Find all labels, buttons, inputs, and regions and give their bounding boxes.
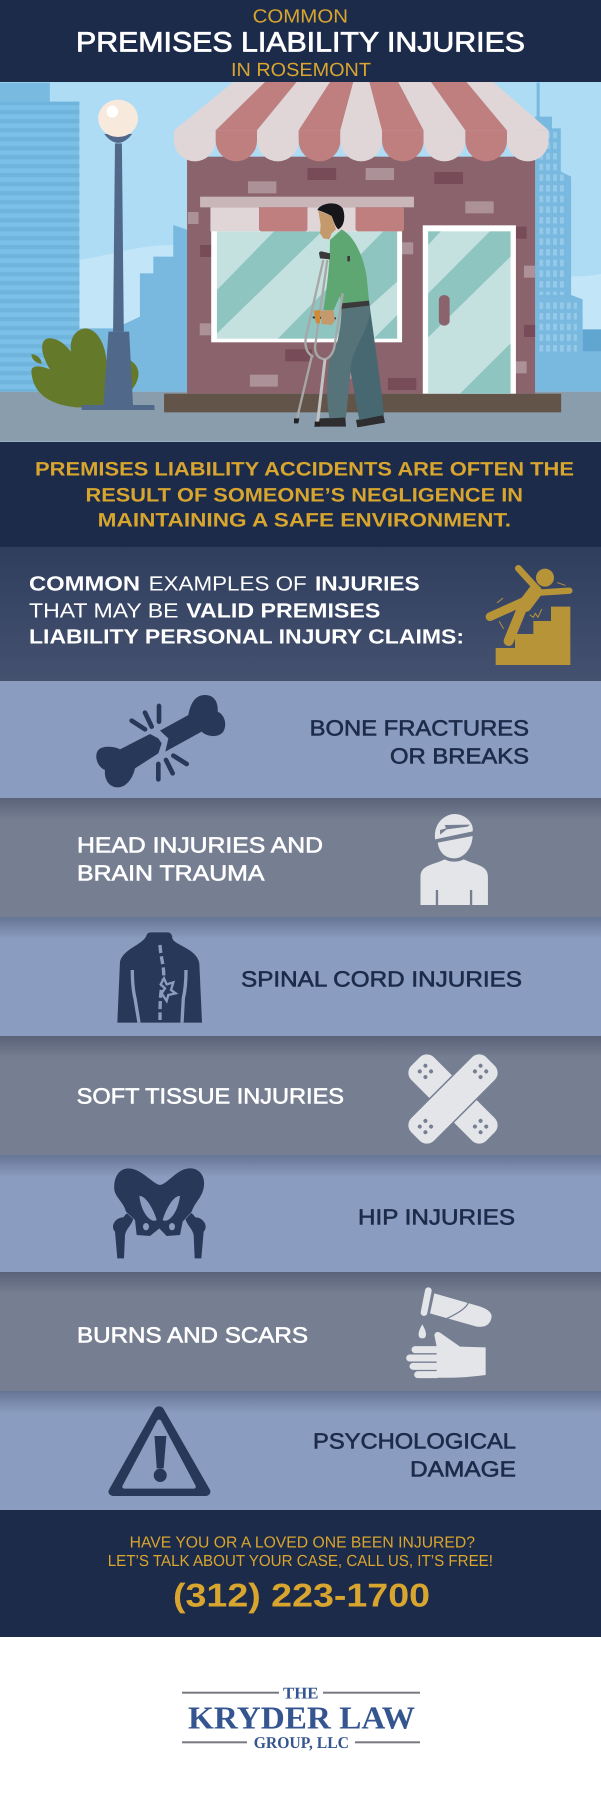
icon: warning triangle [113, 1411, 205, 1492]
row: soft tissue [0, 1036, 601, 1155]
logo: KRYDER LAW [188, 1699, 415, 1735]
phone number: (312) 223-1700 [173, 1577, 430, 1614]
logo: GROUP, LLC [254, 1733, 349, 1752]
icon: chemical on hand [410, 1291, 492, 1378]
label: HIP INJURIES [358, 1205, 515, 1230]
intro panel: common examples [0, 547, 601, 681]
label [310, 716, 529, 768]
intro text: COMMON [29, 572, 140, 595]
label: SPINAL CORD INJURIES [241, 967, 522, 992]
pavement [0, 392, 601, 442]
statement text: RESULT OF SOMEONE’S NEGLIGENCE IN [86, 484, 523, 506]
label: OR BREAKS [390, 743, 529, 768]
icon: broken bone [96, 695, 225, 787]
label [77, 833, 323, 886]
hero background and shop [0, 83, 601, 442]
intro text: THAT MAY BE [29, 600, 178, 623]
row: bone fractures [0, 681, 601, 798]
negligence statement panel [0, 442, 601, 547]
call to action text: LET’S TALK ABOUT YOUR CASE, CALL US, IT’S FREE! [108, 1553, 493, 1570]
header band [0, 0, 601, 82]
statement text: PREMISES LIABILITY ACCIDENTS ARE OFTEN THE [35, 458, 574, 480]
call to action text [108, 1534, 493, 1570]
header line: in Rosemont: IN ROSEMONT [231, 60, 371, 81]
row: head injuries [0, 798, 601, 917]
logo: THE [283, 1684, 318, 1703]
row: psychological damage [0, 1391, 601, 1510]
shop door [423, 225, 516, 394]
header line: common: COMMON [253, 7, 348, 28]
label [313, 1428, 516, 1481]
intro text: LIABILITY PERSONAL INJURY CLAIMS: [29, 625, 464, 648]
intro text: INJURIES [315, 572, 420, 595]
label: SOFT TISSUE INJURIES [77, 1083, 344, 1108]
right tower [535, 83, 601, 392]
hero illustration: storefront with man on crutches [0, 82, 601, 442]
icon: back with spine [117, 932, 202, 1023]
left tower [0, 83, 79, 392]
label: PSYCHOLOGICAL [313, 1428, 516, 1453]
striped awning [174, 82, 549, 161]
label: BRAIN TRAUMA [77, 861, 265, 886]
call to action text: HAVE YOU OR A LOVED ONE BEEN INJURED? [130, 1534, 475, 1551]
shop wall with bricks [187, 157, 535, 394]
intro text: EXAMPLES OF [149, 572, 307, 595]
call to action footer [0, 1510, 601, 1637]
row: burns and scars [0, 1272, 601, 1391]
man on crutches [294, 203, 385, 427]
intro text: VALID PREMISES [186, 600, 380, 623]
shop window [200, 197, 414, 342]
icon: crossed bandages [404, 1050, 502, 1148]
icon: pelvis [113, 1168, 206, 1258]
row: hip injuries [0, 1155, 601, 1272]
intro text [29, 572, 464, 648]
row: spinal cord [0, 917, 601, 1036]
shop step [164, 394, 561, 412]
bush [31, 328, 138, 407]
label: DAMAGE [410, 1456, 516, 1481]
middle stepped building [80, 225, 188, 392]
label: HEAD INJURIES AND [77, 833, 323, 858]
label: BURNS AND SCARS [77, 1322, 308, 1347]
street lamp [82, 100, 154, 410]
icon: person falling on stairs [490, 568, 570, 665]
statement text: MAINTAINING A SAFE ENVIRONMENT. [98, 510, 511, 532]
icon: bandaged head [420, 814, 488, 905]
label: BONE FRACTURES [310, 716, 529, 741]
title: PREMISES LIABILITY INJURIES [76, 27, 525, 58]
logo [182, 1684, 420, 1752]
statement text [35, 458, 574, 532]
